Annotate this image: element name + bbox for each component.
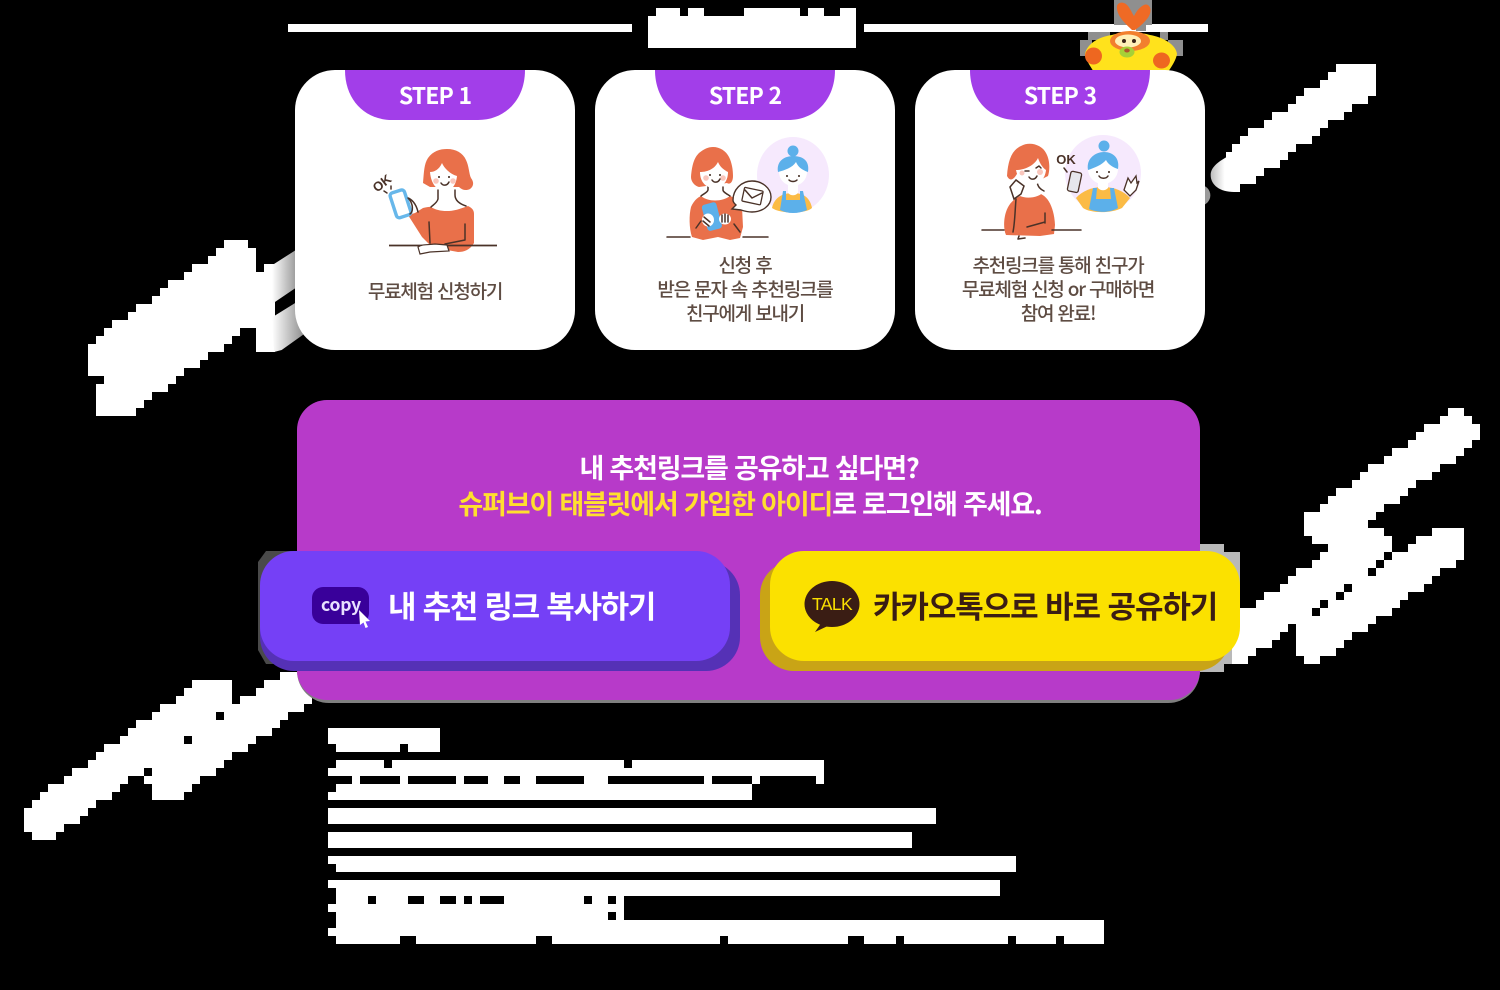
- panel: step 2: 친구에게 보내기: [686, 299, 804, 326]
- notes text block (masked): [328, 728, 1104, 944]
- panel: share area: [297, 400, 1200, 703]
- step 1 tab: [345, 70, 525, 120]
- button: copy recommend link: [258, 551, 740, 671]
- masked background stroke: upper left: [88, 240, 305, 416]
- masked background stroke: lower left: [24, 672, 317, 840]
- masked background stroke: upper right: [1190, 64, 1376, 206]
- panel: step 3: 참여 완료!: [1021, 299, 1095, 326]
- panel: step 3: [915, 70, 1205, 350]
- section title (masked): [288, 8, 1208, 48]
- mascot: yellow duck with goggles: [1080, 0, 1183, 72]
- step 3 tab: [970, 70, 1150, 120]
- share heading: 내 추천링크를 공유하고 싶다면?: [579, 447, 919, 486]
- step 3 caption: 추천링크를 통해 친구가: [972, 251, 1144, 278]
- icon: Kakao talk bubble: TALK: [812, 594, 853, 614]
- icon: woman sending a message to a friend: [667, 137, 829, 240]
- step 2 tab: [655, 70, 835, 120]
- step 3 label: STEP 3: [1024, 77, 1096, 111]
- button: share to KakaoTalk: [760, 544, 1240, 672]
- step 1 caption: 무료체험 신청하기: [368, 277, 502, 304]
- icon: woman on phone and friend giving OK sign: OK: [1056, 152, 1076, 167]
- step 2 caption: 신청 후: [719, 251, 772, 278]
- panel: step 1: [295, 70, 575, 350]
- step 1 label: STEP 1: [399, 77, 471, 111]
- panel: step 2: 받은 문자 속 추천링크를: [657, 275, 833, 302]
- icon: Kakao talk bubble: [804, 581, 860, 632]
- step 2 label: STEP 2: [709, 77, 781, 111]
- icon: copy badge with cursor: copy: [321, 592, 361, 617]
- icon: copy badge with cursor: [312, 587, 370, 628]
- kakao button label: 카카오톡으로 바로 공유하기: [873, 582, 1217, 627]
- icon: woman holding a phone: OK: [370, 171, 395, 195]
- share instruction: 슈퍼브이 태블릿에서 가입한 아이디로 로그인해 주세요.: [458, 483, 1042, 522]
- icon: woman holding a phone: [370, 149, 497, 254]
- panel: step 2: [595, 70, 895, 350]
- masked background stroke: right middle: [1232, 408, 1480, 664]
- panel: step 3: 무료체험 신청 or 구매하면: [962, 275, 1154, 302]
- copy button label: 내 추천 링크 복사하기: [388, 582, 655, 627]
- icon: woman on phone and friend giving OK sign: [982, 135, 1141, 239]
